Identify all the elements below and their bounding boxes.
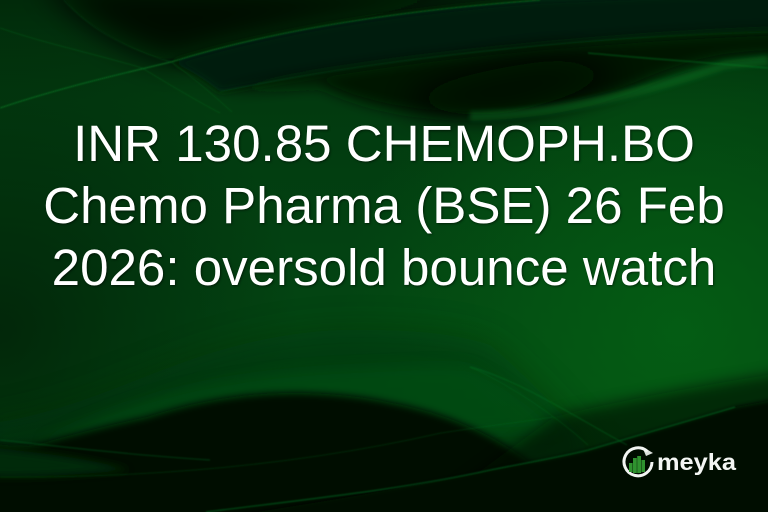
bottom right dark [400,370,768,512]
title [43,115,725,296]
bottom lighter band [40,366,560,444]
title: 2026: oversold bounce watch [52,239,716,296]
logo: meyka [622,446,736,478]
title: Chemo Pharma (BSE) 26 Feb [43,177,725,234]
wordmark: meyka [657,449,736,475]
top light streaks [0,0,768,113]
bottom left lift [0,446,130,477]
top right light band [470,60,768,116]
bottom dark hump [0,393,560,512]
top dark wave [40,0,540,62]
icon: ring with bars [624,446,653,476]
title: INR 130.85 CHEMOPH.BO [73,115,695,172]
bottom light streaks [0,367,735,512]
bottom upper shade [0,330,600,500]
